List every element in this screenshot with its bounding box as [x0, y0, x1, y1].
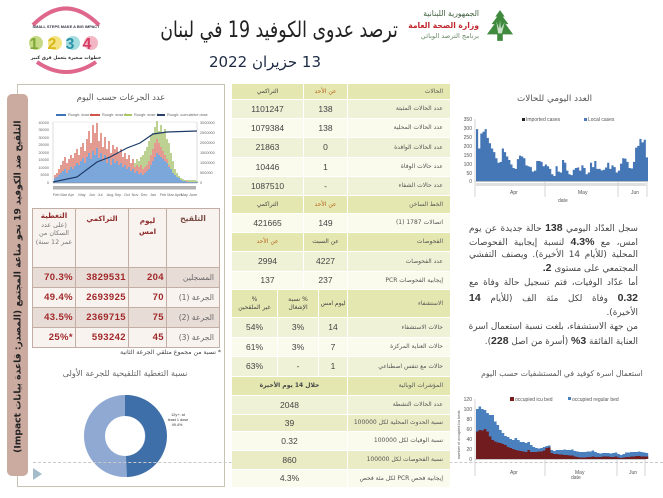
row: hotline calls: اتصالات 1787 (1): [396, 219, 443, 226]
row: dose 3: 593242: [92, 332, 126, 343]
row: active cases: عدد الحالات النشطة: [393, 401, 443, 408]
row: registered: المسجلين: [183, 273, 214, 282]
heading: daily doses chart: عدد الجرعات حسب اليوم: [77, 92, 165, 102]
chart: doses per day: Rough: dose 1: [68, 113, 93, 117]
chart: doses per day: Dec: [141, 193, 147, 197]
row: hospitalised: [232, 318, 450, 338]
vertical label: vaccination toward community immunity: التلقيح ضد الكوفيد 19 نحو مناعة المجتمع (المصدر: قاعدة بيانات Impact): [12, 120, 23, 452]
row: local: 138: [318, 123, 333, 133]
row: hospitalised: 14: [328, 322, 338, 332]
row: local: 1079384: [251, 123, 284, 133]
row: active cases: 2048: [280, 400, 299, 410]
table header: [32, 208, 220, 268]
chart: doses per day: 500000: [200, 171, 213, 175]
row: intensive care: 7: [331, 342, 335, 352]
chart: hospital beds: 40: [466, 437, 472, 443]
row: ventilated: 1: [331, 361, 335, 371]
chart: doses per day: Apr: [68, 193, 75, 197]
panel: vaccination: [17, 84, 225, 487]
row: hotline calls: [232, 214, 450, 233]
chart: doses per day: Rough: dose 2: [102, 113, 127, 117]
tests header: الفحوصات: [417, 238, 443, 245]
row: hospitalised: حالات الاستشفاء: [402, 324, 443, 331]
row: recovered: [232, 177, 450, 196]
icon: triangle marker: [33, 468, 42, 480]
chart: hospital beds: occupied icu bed: [515, 397, 553, 403]
tests header: عن الأحد: [256, 238, 279, 245]
row: dose 2: 75: [153, 312, 164, 323]
row: tests rate: نسبة الفحوصات لكل 100000: [367, 456, 443, 463]
row: imported: 0: [323, 142, 328, 152]
row: dose 3: [32, 328, 220, 348]
row: deaths rate: 0.32: [281, 436, 298, 446]
row: tests: [232, 252, 450, 272]
chart: doses per day: Rough: dose 3: [134, 113, 159, 117]
row: deaths: 10446: [256, 162, 279, 172]
chart: hospital beds: 0: [469, 457, 472, 463]
hospital header: الاستشفاء: [418, 300, 443, 307]
row: dose 2: 2369715: [86, 312, 126, 323]
paragraph: cases: سجل العدّاد اليومي 138 حالة جديدة عن يوم: [469, 222, 638, 234]
chart: doses per day: 15000: [38, 158, 49, 162]
cases header: التراكمي: [257, 88, 278, 95]
chart: first dose donut: 49.4%: [172, 423, 183, 427]
chart: daily cases: 0: [469, 179, 472, 185]
row: deaths rate: نسبة الوفيات لكل 100000: [374, 437, 443, 444]
chart: doses per day: 5000: [41, 173, 49, 177]
ministry name: [408, 9, 479, 40]
row: confirmed: [232, 100, 450, 119]
ministry name: برنامج الترصد الوبائي: [421, 32, 479, 40]
hotline header: عن الأحد: [314, 201, 337, 208]
paragraph: cases: المجتمعي على مستوى 2.: [543, 262, 638, 274]
row: imported: عدد الحالات الوافدة: [394, 144, 443, 151]
ministry name: وزارة الصحة العامة: [408, 20, 479, 30]
text block: daily summary: [469, 222, 638, 347]
chart: daily cases: [464, 117, 648, 202]
chart: daily cases: May: [578, 190, 588, 196]
row: deaths: [232, 158, 450, 177]
chart: hospital beds: 100: [464, 407, 472, 413]
row: PCR positivity: 137: [260, 275, 275, 285]
table header: امس: [139, 227, 156, 236]
logo: small steps make a big impact: خطوات صغيرة بتعمل فرق كبير: [30, 55, 101, 61]
row: hospitalised: 54%: [246, 322, 263, 332]
row: dose 3: الجرعة (3): [179, 333, 214, 342]
chart: doses per day: 3000000: [200, 121, 215, 125]
footnote: share of second dose recipients: * نسبة من مجموع متلقي الجرعة الثانية: [120, 349, 221, 356]
title: ترصد عدوى الكوفيد 19 في لبنان: [160, 18, 398, 43]
chart: doses per day: May June: [181, 193, 197, 197]
row: positivity: [232, 470, 450, 488]
chart: doses per day: Oct: [124, 193, 131, 197]
vertical label: vaccination toward community immunity: [7, 94, 28, 476]
table: cases, tests, hospital and indicators: [232, 84, 450, 487]
paragraph: hospital: العناية الفائقة 3% (أسرة من اصل 228).: [485, 335, 638, 347]
chart: doses per day: 20000: [38, 151, 49, 155]
row: dose 1: 70: [153, 292, 164, 303]
row: positivity: 4.3%: [280, 473, 299, 483]
row: ventilated: حالات مع تنفس اصطناعي: [378, 363, 443, 370]
chart: doses per day: Jan: [150, 193, 156, 197]
row: local incidence: [232, 415, 450, 432]
chart: doses per day: May: [78, 193, 86, 197]
indicators header: المؤشرات الوبائية: [399, 382, 443, 389]
row: ventilated: 63%: [246, 361, 263, 371]
row: confirmed: عدد الحالات المثبتة: [396, 105, 443, 112]
paragraph: hospital: من جهة الاستشفاء، بلغت نسبة استعمال اسرة: [469, 322, 638, 332]
chart: first dose donut: [84, 395, 188, 477]
chart: hospital beds: 80: [466, 417, 472, 423]
logo: small steps make a big impact: 2: [48, 36, 57, 53]
row: hotline calls: 149: [318, 218, 333, 228]
row: PCR positivity: 237: [318, 275, 333, 285]
row: local incidence: 39: [285, 418, 294, 428]
table header: التراكمي: [86, 214, 118, 223]
row: intensive care: حالات العناية المركزة: [390, 343, 443, 350]
table header: ليوم: [140, 216, 155, 225]
chart: hospital beds: 60: [466, 427, 472, 433]
chart: doses per day: 35000: [38, 128, 49, 132]
row: registered: 204: [147, 272, 164, 283]
logo: small steps make a big impact: 1: [30, 36, 39, 53]
ministry name: الجمهورية اللبنانية: [423, 9, 479, 18]
chart: first dose donut: least 1 dose: [168, 418, 188, 422]
row: intensive care: [232, 338, 450, 357]
paragraph: deaths: الأخيرة).: [606, 308, 638, 318]
heading: first dose coverage: نسبة التغطية التلقيحية للجرعة الأولى: [63, 368, 187, 378]
table: vaccination doses: [32, 208, 220, 348]
row: hospitalised: 3%: [292, 322, 304, 332]
hotline header: التراكمي: [257, 201, 278, 208]
tests header: [232, 233, 450, 252]
row: imported: [232, 138, 450, 158]
hospital header: ليوم امس: [321, 300, 345, 307]
row: recovered: عدد حالات الشفاء: [399, 182, 443, 189]
chart: doses per day: 10000: [38, 166, 49, 170]
row: recovered: -: [324, 181, 327, 191]
chart: daily cases: 100: [464, 162, 472, 168]
chart: hospital beds: Apr: [510, 470, 518, 476]
heading: daily cases: العدد اليومي للحالات: [517, 94, 592, 104]
logo: small steps make a big impact: 4: [83, 36, 92, 53]
chart: hospital beds: [457, 397, 648, 481]
chart: daily cases: Local cases: [588, 117, 615, 123]
chart: doses per day: Jul: [98, 193, 103, 197]
paragraph: cases: [469, 222, 638, 274]
chart: daily cases: 150: [464, 153, 472, 159]
paragraph: deaths: أما عدّاد الوفيات، فتم تسجيل حالة وفاة مع: [469, 278, 638, 288]
chart: hospital beds: May: [575, 470, 585, 476]
row: local incidence: نسبة الحدوث المحلية لكل 100000: [354, 419, 443, 426]
chart: doses per day: 0: [200, 181, 202, 185]
chart: hospital beds: 20: [466, 447, 472, 453]
chart: daily cases: 200: [464, 144, 472, 150]
chart: doses per day: 1500000: [200, 151, 215, 155]
row: hotline calls: 421665: [253, 218, 282, 228]
chart: doses per day: Feb Mar April: [160, 193, 182, 197]
row: dose 1: 49.4%: [44, 292, 73, 303]
row: local: [232, 119, 450, 138]
hospital header: %: [252, 296, 257, 303]
cases header: عن الأحد: [314, 88, 337, 95]
row: dose 2: 43.5%: [44, 312, 73, 323]
row: ventilated: -: [297, 361, 299, 371]
heading: hospital beds: استعمال اسرة كوفيد في المستشفيات حسب اليوم: [481, 369, 643, 378]
row: dose 1: 2693925: [86, 292, 126, 303]
logo: small steps make a big impact: 3: [66, 36, 75, 53]
row: ventilated: [232, 357, 450, 377]
row: imported: 21863: [256, 142, 279, 152]
chart: doses per day: 30000: [38, 136, 49, 140]
chart: doses per day: Jun: [89, 193, 95, 197]
row: dose 2: الجرعة (2): [179, 313, 214, 322]
row: local: عدد الحالات المحلية: [394, 124, 443, 131]
table header: التلقيح: [180, 214, 206, 223]
row: confirmed: 138: [318, 104, 333, 114]
paragraph: cases: امس، مع 4.3% لنسبة إيجابية الفحوصات: [469, 236, 638, 248]
row: dose 3: 25%*: [49, 332, 73, 343]
chart: doses per day: Sep: [115, 193, 121, 197]
row: PCR positivity: إيجابية الفحوصات PCR: [385, 277, 443, 284]
indicators header: خلال 14 يوم الأخيرة: [260, 382, 319, 389]
chart: doses per day: Feb Mar: [53, 193, 68, 197]
chart: daily cases: 250: [464, 135, 472, 141]
hospital header: [232, 290, 450, 318]
row: registered: 70.3%: [44, 272, 73, 283]
indicators header: [232, 377, 450, 396]
chart: doses per day: 2500000: [200, 131, 215, 135]
chart: doses per day: [38, 113, 215, 197]
hospital header: % نسبة: [288, 296, 308, 303]
row: dose 1: [32, 288, 220, 308]
row: dose 3: 45: [153, 332, 164, 343]
tests header: عن السبت: [312, 238, 339, 245]
row: registered: 3829531: [86, 272, 126, 283]
hotline header: الخط الساخن: [409, 201, 443, 208]
row: deaths rate: [232, 432, 450, 451]
chart: doses per day: 0: [47, 181, 49, 185]
row: tests rate: 860: [282, 455, 297, 465]
chart: hospital beds: number of occupied icu beds: [457, 410, 461, 459]
table header: التغطية: [41, 211, 67, 220]
row: dose 2: [32, 308, 220, 328]
logo: small steps make a big impact: [29, 6, 101, 74]
chart: doses per day: Rough: cumulative dose: [167, 113, 208, 117]
chart: hospital beds: date: [571, 475, 581, 481]
row: tests: 4227: [316, 256, 335, 266]
row: dose 1: الجرعة (1): [179, 293, 214, 302]
row: tests rate: [232, 451, 450, 470]
hotline header: [232, 196, 450, 214]
chart: daily cases: 300: [464, 126, 472, 132]
row: registered: [32, 268, 220, 288]
chart: doses per day: 40000: [38, 121, 49, 125]
chart: daily cases: Apr: [510, 190, 518, 196]
paragraph: cases: المحلية (للأيام 14 الأخيرة). ويصنف التفشي: [469, 250, 638, 260]
row: confirmed: 1101247: [251, 104, 284, 114]
icon: cedar: [487, 10, 513, 41]
paragraph: hospital: [469, 322, 638, 347]
row: deaths: 1: [323, 162, 328, 172]
dashed divider: [33, 462, 663, 463]
chart: hospital beds: occupied regular bed: [572, 397, 619, 403]
paragraph: deaths: 0.32 وفاة لكل مئة الف (للأيام 14: [469, 292, 638, 304]
chart: doses per day: 25000: [38, 143, 49, 147]
row: intensive care: 3%: [292, 342, 304, 352]
table header: (على عدد السكان من عمر 12 سنة): [36, 220, 72, 246]
chart: daily cases: Imported cases: [526, 117, 561, 123]
paragraph: deaths: [469, 276, 638, 318]
cases header: الحالات: [425, 88, 443, 95]
chart: first dose donut: 12y+: at: [171, 413, 186, 417]
chart: doses per day: 1000000: [200, 161, 215, 165]
chart: doses per day: Aug: [107, 193, 113, 197]
row: deaths: عدد حالات الوفاة: [401, 163, 443, 170]
hospital header: الإشغال: [288, 304, 308, 310]
chart: doses per day: 2000000: [200, 141, 215, 145]
date: 13 حزيران 2022: [209, 53, 321, 71]
row: tests: عدد الفحوصات: [406, 258, 443, 265]
chart: daily cases: 350: [464, 117, 472, 123]
chart: daily cases: Jun: [631, 190, 639, 196]
logo: ministry of public health: [408, 9, 513, 41]
chart: hospital beds: Jun: [629, 470, 637, 476]
row: PCR positivity: [232, 272, 450, 290]
chart: daily cases: 50: [466, 171, 472, 177]
chart: hospital beds: 120: [464, 397, 472, 403]
logo: small steps make a big impact: SMALL STEPS MAKE A BIG IMPACT: [32, 24, 100, 29]
row: tests: 2994: [258, 256, 277, 266]
row: positivity: إيجابية فحص PCR لكل مئة فحص: [360, 475, 443, 482]
row: active cases: [232, 396, 450, 415]
row: intensive care: 61%: [246, 342, 263, 352]
chart: doses per day: Nov: [132, 193, 138, 197]
cases header: [232, 84, 450, 100]
row: recovered: 1087510: [251, 181, 284, 191]
hospital header: غير الملقحين: [238, 304, 271, 310]
